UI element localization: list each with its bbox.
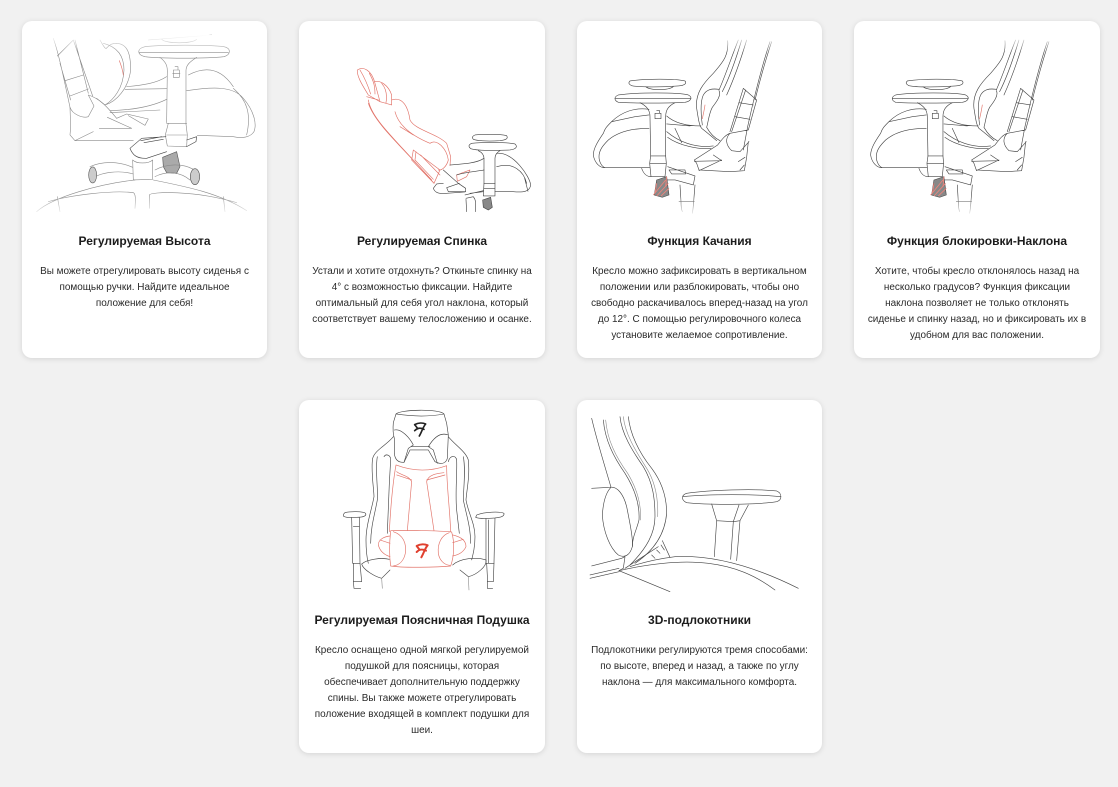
illustration: chair front view with red lumbar cushion (343, 410, 504, 590)
illustration: chair side view, tilt lock (870, 40, 1050, 214)
panel: adjustable height (22, 21, 267, 358)
description: положении или разблокировать, чтобы оно (600, 282, 799, 293)
panel: adjustable backrest (299, 21, 545, 358)
description: помощью ручки. Найдите идеальное (59, 282, 230, 293)
panel: 3D armrests (577, 400, 822, 753)
description: подушкой для поясницы, которая (345, 661, 499, 672)
heading: Функция Качания (647, 234, 752, 248)
illustration: close-up of 3D armrest (590, 416, 799, 592)
description: наклона позволяет не только отклонять (885, 298, 1069, 309)
description: несколько градусов? Функция фиксации (884, 282, 1070, 293)
heading: 3D-подлокотники (648, 613, 751, 627)
panel: rocking function (577, 21, 822, 358)
description: установите желаемое сопротивление. (611, 330, 788, 341)
description: Хотите, чтобы кресло отклонялось назад на (875, 266, 1079, 277)
heading: Регулируемая Высота (78, 234, 210, 248)
description: положение для себя! (96, 298, 193, 309)
description: по высоте, вперед и назад, а также по углу (600, 661, 799, 672)
description: шеи. (411, 725, 433, 736)
heading: Регулируемая Спинка (357, 234, 487, 248)
description: удобном для вас положении. (910, 330, 1044, 341)
description: соответствует вашему телосложению и осанке. (312, 314, 532, 325)
description (868, 266, 1086, 341)
description (591, 266, 808, 341)
illustration: reclined chair with red backrest (356, 68, 531, 212)
heading: Функция блокировки-Наклона (887, 234, 1067, 248)
panel: tilt lock function (854, 21, 1100, 358)
description: Подлокотники регулируются тремя способами: (591, 645, 808, 656)
description (312, 266, 532, 325)
description (315, 645, 529, 736)
description: наклона — для максимального комфорта. (602, 677, 797, 688)
description (591, 645, 808, 688)
description: оптимальный для себя угол наклона, который (316, 298, 528, 309)
illustration: chair side view, height adjustment (36, 34, 256, 212)
description: сиденье и спинку назад, но и фиксировать их в (868, 314, 1086, 325)
description: положение входящей в комплект подушки для (315, 709, 529, 720)
panel: lumbar cushion (299, 400, 545, 753)
heading: Регулируемая Поясничная Подушка (314, 613, 530, 627)
illustration: chair side view, rocking (593, 40, 772, 214)
description: Кресло можно зафиксировать в вертикальном (592, 266, 807, 277)
description: свободно раскачивалось вперед-назад на угол (591, 298, 808, 309)
description: до 12°. С помощью регулировочного колеса (598, 314, 801, 325)
description: Кресло оснащено одной мягкой регулируемой (315, 645, 529, 656)
description: 4° с возможностью фиксации. Найдите (332, 282, 512, 293)
description: Вы можете отрегулировать высоту сиденья с (40, 266, 249, 277)
description: Устали и хотите отдохнуть? Откиньте спинку на (312, 266, 532, 277)
description (40, 266, 249, 309)
description: обеспечивает дополнительную поддержку (324, 677, 520, 688)
description: спины. Вы также можете отрегулировать (328, 693, 516, 704)
